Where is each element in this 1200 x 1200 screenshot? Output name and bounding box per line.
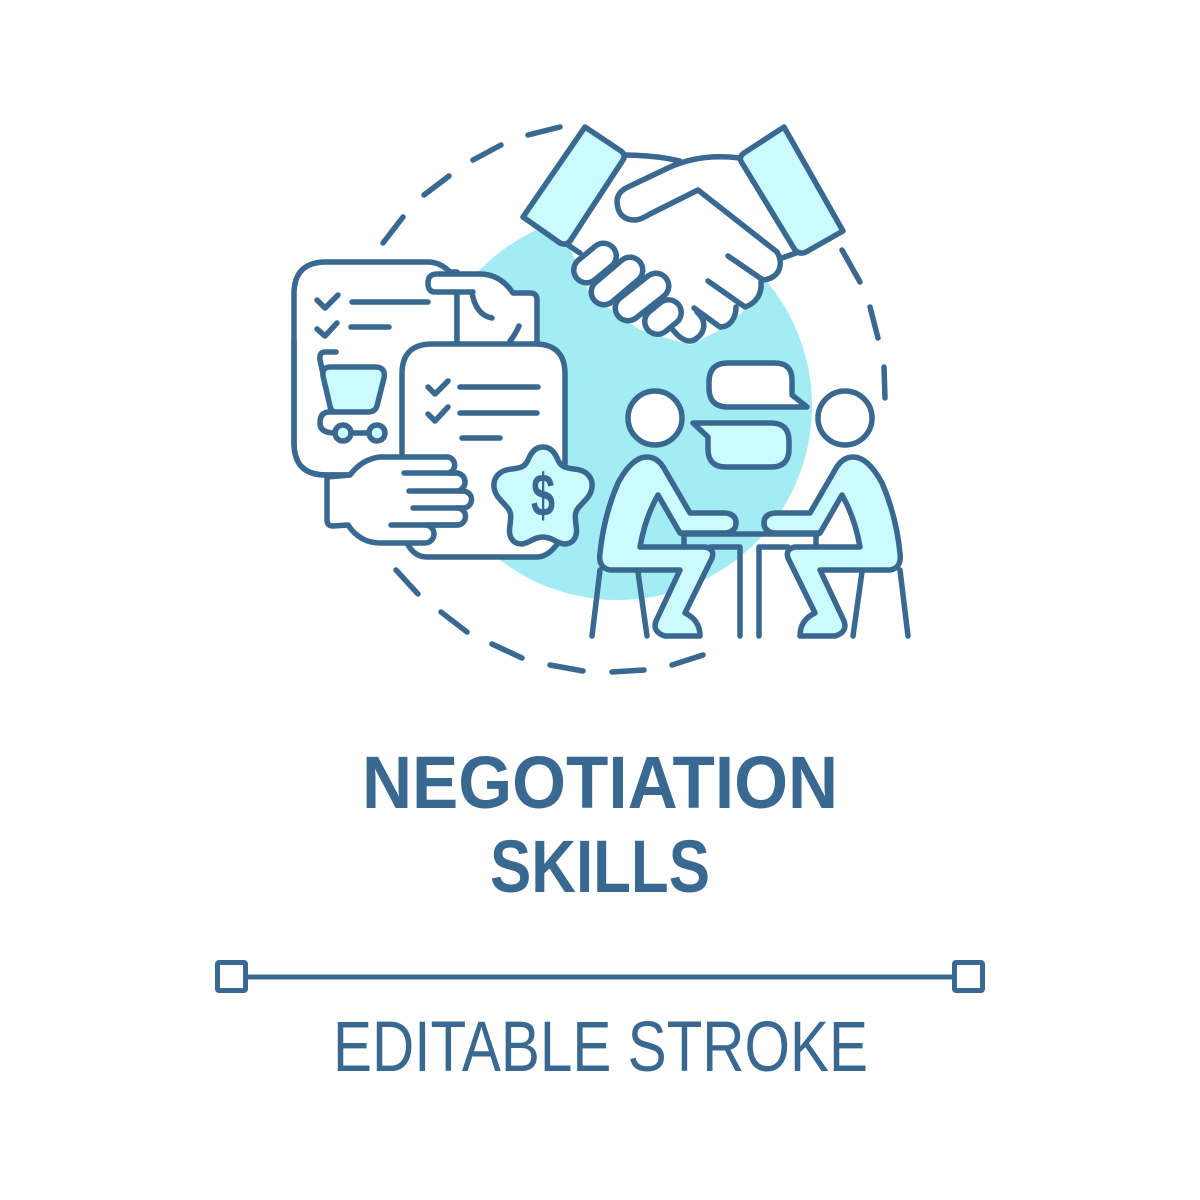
finger 4	[658, 312, 668, 322]
title	[362, 741, 838, 908]
icon: speech bubble top	[709, 363, 807, 407]
title: NEGOTIATION	[362, 741, 838, 824]
icon: dollar star badge	[494, 447, 592, 544]
caption: EDITABLE STROKE	[333, 1008, 868, 1087]
icon: table	[682, 534, 818, 636]
left cuff	[523, 127, 624, 244]
top hand	[428, 274, 537, 345]
finger 2	[604, 270, 630, 292]
dashed ring	[383, 127, 885, 672]
bottom hand	[327, 457, 472, 543]
finger 1	[586, 256, 604, 270]
finger 3	[628, 286, 656, 308]
background circle	[424, 212, 812, 600]
checklist rows	[317, 295, 428, 336]
icon: speech bubble bottom	[693, 423, 789, 467]
stroke sample line with handles	[218, 962, 982, 990]
checklist rows	[428, 381, 538, 438]
icon: front document with price badge	[327, 344, 592, 557]
icon: handshake	[523, 127, 843, 345]
icon: left person at table	[592, 391, 736, 636]
title: SKILLS	[490, 825, 710, 908]
right cuff	[740, 127, 843, 253]
icon: shopping cart	[320, 352, 385, 441]
icon: right person at table	[764, 391, 908, 636]
icon: back document with cart	[294, 262, 537, 475]
icon: dollar star badge: $	[531, 463, 555, 530]
